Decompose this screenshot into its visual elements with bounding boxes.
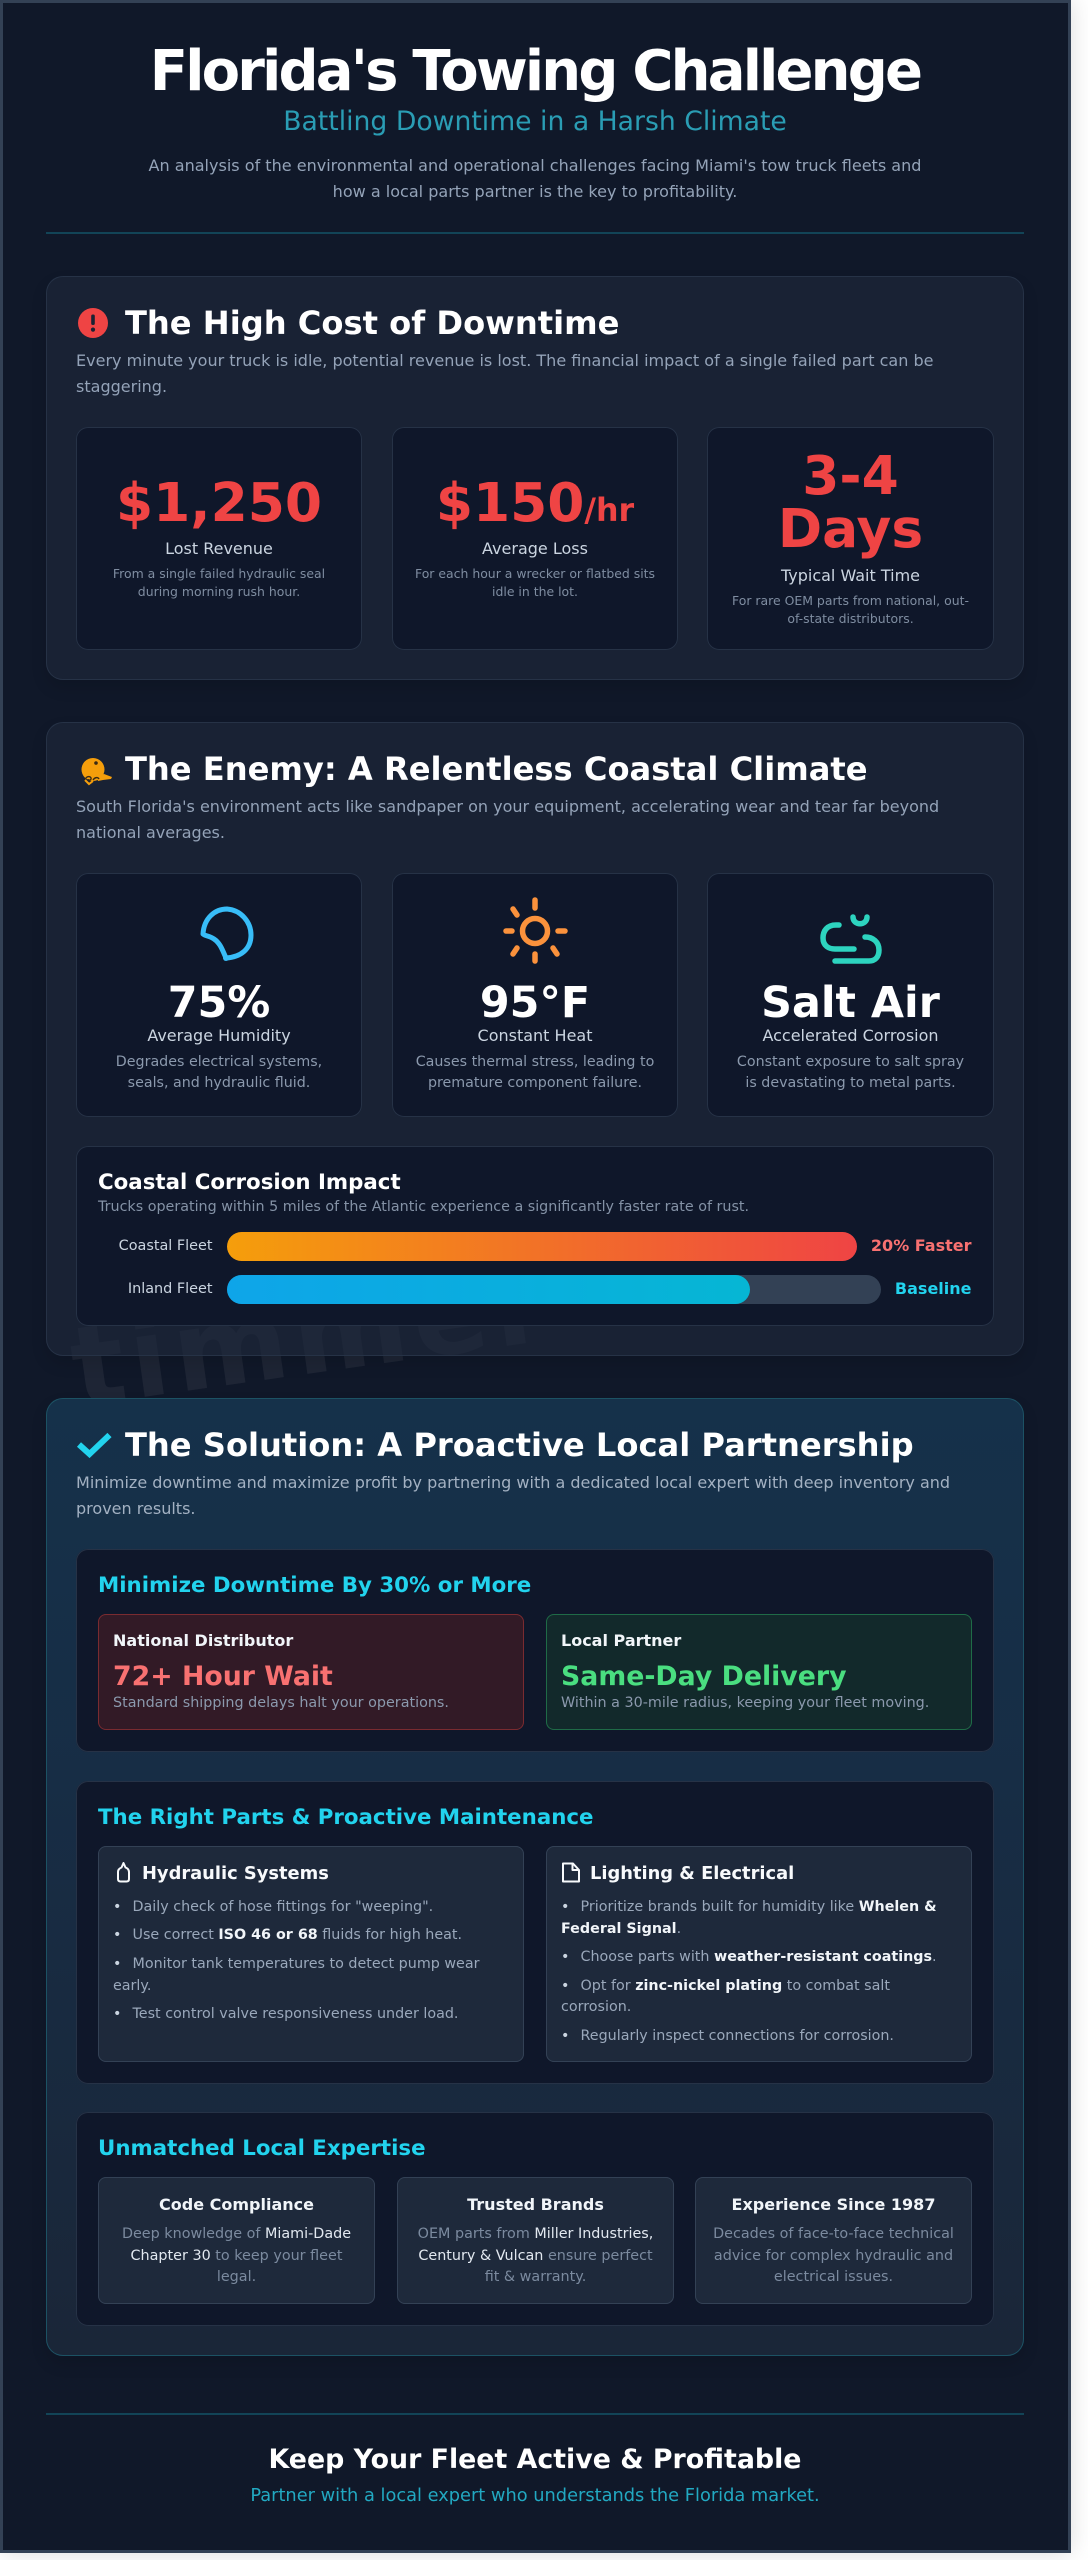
comparison: national distributor [98, 1614, 524, 1730]
checklist: Daily check of hose fittings for "weeping". [132, 1899, 433, 1915]
card text: Deep knowledge of Miami-Dade [122, 2226, 351, 2242]
headline: 72+ Hour Wait [113, 1661, 333, 1692]
stat card: average loss [392, 427, 678, 650]
checklist: Opt for zinc-nickel plating to combat salt corrosion. [561, 1978, 890, 2015]
card text: fit & warranty. [485, 2269, 586, 2285]
checklist: Test control valve responsiveness under load. [132, 2006, 458, 2022]
checklist: • [561, 1899, 569, 1915]
stat note: during morning rush hour. [138, 584, 300, 599]
checklist: Monitor tank temperatures to detect pump wear early. [113, 1956, 480, 1994]
card heading: Experience Since 1987 [732, 2195, 935, 2214]
headline: Same-Day Delivery [561, 1661, 847, 1692]
checklist [113, 1899, 480, 2022]
panel: the high cost of downtime [46, 276, 1024, 680]
block heading: Minimize Downtime By 30% or More [98, 1573, 531, 1598]
label: Local Partner [561, 1631, 681, 1650]
subtitle: Battling Downtime in a Harsh Climate [283, 106, 787, 137]
stat note [737, 1054, 964, 1091]
stat note: seals, and hydraulic fluid. [128, 1075, 310, 1091]
stat value: $1,250 [116, 470, 322, 534]
stat label: Accelerated Corrosion [762, 1026, 939, 1045]
section intro: South Florida's environment acts like sandpaper on your equipment, accelerating wear and tear far beyond [76, 797, 939, 816]
stat note: Causes thermal stress, leading to [416, 1054, 654, 1070]
section intro: staggering. [76, 377, 167, 396]
stat note: of-state distributors. [787, 611, 914, 626]
block heading: The Right Parts & Proactive Maintenance [98, 1805, 594, 1830]
block: local expertise [76, 2112, 994, 2326]
panel: the enemy climate [46, 722, 1024, 1356]
stat value [778, 444, 923, 560]
icon: wind [820, 914, 882, 964]
stat card: lost revenue [76, 427, 362, 650]
card text: electrical issues. [774, 2269, 893, 2285]
stat value: Days [778, 497, 923, 560]
icon: check mark [77, 1432, 112, 1458]
card: lighting and electrical [546, 1846, 972, 2062]
note: Within a 30-mile radius, keeping your fleet moving. [561, 1695, 929, 1711]
checklist: • [561, 1978, 569, 1994]
stat note: From a single failed hydraulic seal [113, 566, 325, 581]
section intro: national averages. [76, 823, 225, 842]
card heading: Trusted Brands [467, 2195, 604, 2214]
label: National Distributor [113, 1631, 293, 1650]
checklist: • [113, 1899, 121, 1915]
checklist: Choose parts with weather-resistant coatings. [580, 1949, 937, 1965]
stat note: Degrades electrical systems, [116, 1054, 322, 1070]
block heading: Unmatched Local Expertise [98, 2136, 426, 2161]
checklist: • [113, 2006, 121, 2022]
stat value: 75% [168, 978, 270, 1028]
stat note [415, 566, 655, 599]
stat note [416, 1054, 654, 1091]
card: experience [695, 2177, 972, 2304]
stat note: For rare OEM parts from national, out- [732, 593, 969, 608]
stat note [732, 593, 969, 626]
card text: OEM parts from Miller Industries, [418, 2226, 653, 2242]
climate card: humidity [76, 873, 362, 1117]
header description: how a local parts partner is the key to profitability. [333, 182, 737, 201]
bar: inland fleet [226, 1275, 881, 1304]
icon: document [562, 1862, 580, 1882]
bar chart: coastal corrosion impact [76, 1146, 994, 1326]
section intro: Minimize downtime and maximize profit by partnering with a dedicated local expert with deep inventory and [76, 1473, 950, 1492]
card text: legal. [217, 2269, 256, 2285]
card text: Century & Vulcan ensure perfect [418, 2248, 653, 2264]
heading: The High Cost of Downtime [125, 304, 619, 342]
heading: The Solution: A Proactive Local Partnership [125, 1426, 914, 1464]
icon: hurricane [82, 758, 112, 786]
stat note: For each hour a wrecker or flatbed sits [415, 566, 655, 581]
card text: Chapter 30 to keep your fleet [131, 2248, 342, 2264]
stat card: wait time [707, 427, 994, 650]
card text [418, 2226, 653, 2285]
footer heading: Keep Your Fleet Active & Profitable [269, 2444, 801, 2475]
heading: The Enemy: A Relentless Coastal Climate [125, 750, 868, 788]
header description [148, 156, 921, 201]
checklist: • [561, 1949, 569, 1965]
bar: coastal fleet [226, 1232, 857, 1261]
section intro: Every minute your truck is idle, potential revenue is lost. The financial impact of a single failed part can be [76, 351, 934, 370]
card text [122, 2226, 351, 2285]
checklist: Prioritize brands built for humidity like Whelen & Federal Signal. [561, 1899, 937, 1937]
bar value: coastal: 20% Faster [871, 1236, 972, 1255]
stat note: idle in the lot. [492, 584, 578, 599]
icon: water drop [200, 906, 254, 961]
stat label: Constant Heat [478, 1026, 592, 1045]
stat value: $150/hr [436, 470, 634, 534]
checklist [561, 1899, 937, 2044]
checklist: • [113, 1927, 121, 1943]
checklist: • [561, 2028, 569, 2044]
card: code compliance [98, 2177, 375, 2304]
card heading: Lighting & Electrical [590, 1863, 794, 1884]
comparison: local partner [546, 1614, 972, 1730]
block: parts and maintenance [76, 1781, 994, 2084]
section intro: proven results. [76, 1499, 196, 1518]
card text: Decades of face-to-face technical [713, 2226, 954, 2242]
stat note [116, 1054, 322, 1091]
bar label: coastal: Coastal Fleet [119, 1238, 212, 1254]
header description: An analysis of the environmental and operational challenges facing Miami's tow truck fleets and [149, 156, 921, 175]
stat label: Average Humidity [147, 1026, 291, 1045]
card text: advice for complex hydraulic and [714, 2248, 953, 2264]
stat label: Typical Wait Time [781, 566, 920, 585]
stat note: premature component failure. [428, 1075, 642, 1091]
climate card: heat [392, 873, 678, 1117]
card heading: Hydraulic Systems [142, 1863, 329, 1884]
icon: oil bottle [117, 1862, 130, 1882]
card text [713, 2226, 954, 2285]
footer tagline: Partner with a local expert who understands the Florida market. [250, 2485, 820, 2506]
checklist: Regularly inspect connections for corrosion. [580, 2028, 894, 2044]
checklist: Use correct ISO 46 or 68 fluids for high heat. [132, 1927, 462, 1943]
stat value: 3-4 [802, 444, 899, 507]
bar label: inland: Inland Fleet [128, 1281, 212, 1297]
section intro [76, 1473, 950, 1518]
panel: the solution [46, 1398, 1024, 2356]
chart subtitle: Trucks operating within 5 miles of the Atlantic experience a significantly faster rate of rust. [98, 1199, 749, 1215]
block: minimize downtime [76, 1549, 994, 1752]
title: Florida's Towing Challenge [150, 39, 920, 104]
stat value: 95°F [480, 978, 590, 1028]
stat label: Lost Revenue [165, 539, 273, 558]
section intro [76, 351, 934, 396]
stat note: is devastating to metal parts. [745, 1075, 956, 1091]
stat value: Salt Air [761, 978, 940, 1028]
icon: alert circle [78, 308, 108, 338]
card heading: Code Compliance [159, 2195, 314, 2214]
watermark: timmer [63, 1238, 561, 1432]
note: Standard shipping delays halt your operations. [113, 1695, 449, 1711]
stat label: Average Loss [482, 539, 588, 558]
stat note [113, 566, 325, 599]
climate card: salt air [707, 873, 994, 1117]
stat note: Constant exposure to salt spray [737, 1054, 964, 1070]
section intro [76, 797, 939, 842]
card: hydraulic systems [98, 1846, 524, 2062]
chart title: Coastal Corrosion Impact [98, 1170, 401, 1195]
bar value: inland: Baseline [895, 1279, 972, 1298]
checklist: • [113, 1956, 121, 1972]
icon: sun [503, 897, 568, 964]
card: trusted brands [397, 2177, 674, 2304]
